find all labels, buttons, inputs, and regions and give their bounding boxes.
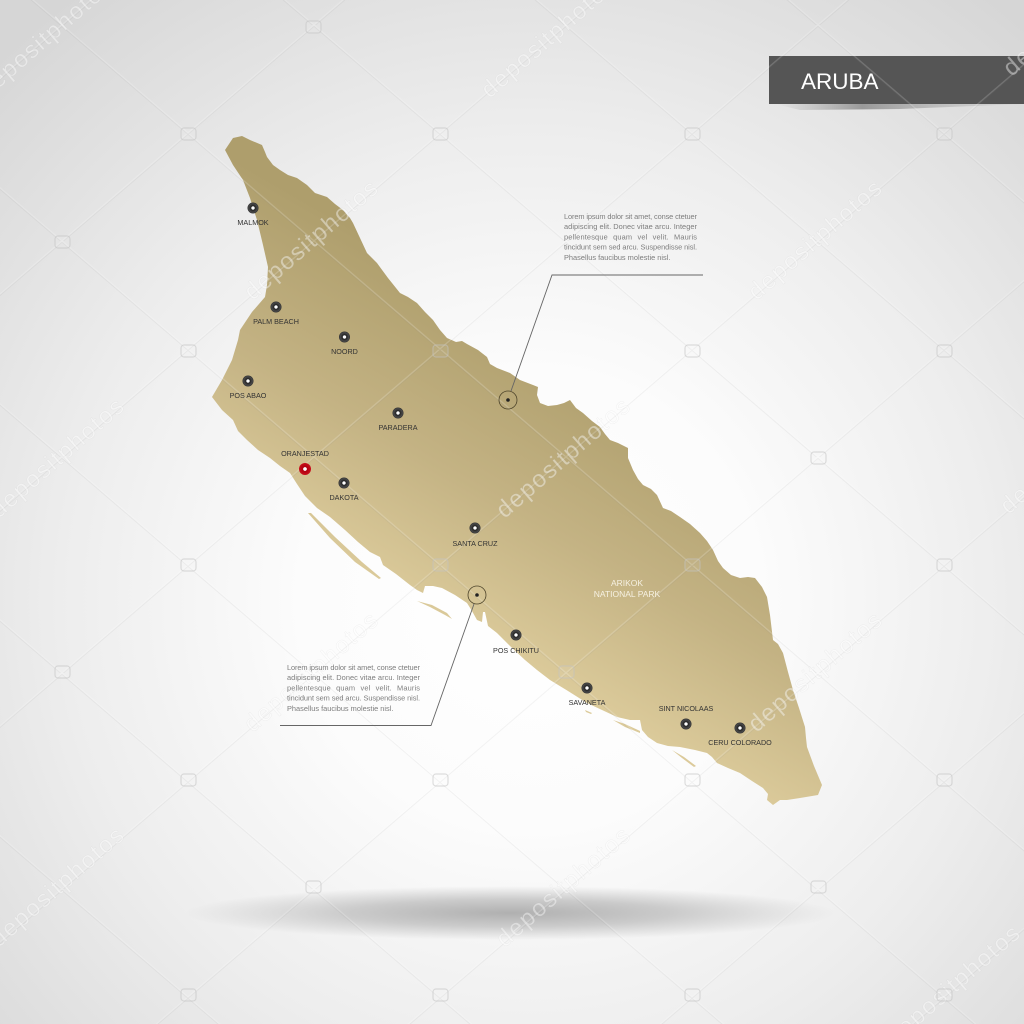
city labels: NOORD [331,347,358,356]
city labels: SINT NICOLAAS [659,704,713,713]
callout: lower: tincidunt sem sed arcu. Suspendisse nisl. [287,694,420,703]
callout: upper: pellentesque quam vel velit. Mauris [564,232,697,241]
title banner shadow [775,104,1024,110]
watermark text: depositphotos [239,607,383,738]
watermark text: depositphotos [743,607,887,738]
callout: upper: adipiscing elit. Donec vitae arcu. Integer [564,222,698,231]
watermark text: depositphotos [239,175,383,306]
callout: lower: Phasellus faucibus molestie nisl. [287,704,393,713]
islet: small reef [585,710,592,714]
city labels: POS CHIKITU [493,646,539,655]
islet: Sint Nicolaas reef [672,750,696,767]
city labels: PARADERA [378,423,418,432]
callout: upper: Lorem ipsum dolor sit amet, conse ctetuer [564,212,698,221]
watermark text: depositphotos [491,822,635,953]
ground shadow [185,886,835,940]
title banner: ARUBA [801,69,879,94]
callout: lower: pellentesque quam vel velit. Mauris [287,683,420,692]
city labels: PALM BEACH [253,317,299,326]
title banner [769,56,1024,104]
city labels: POS ABAO [230,391,267,400]
callout: upper: tincidunt sem sed arcu. Suspendisse nisl. [564,243,697,252]
park label: NATIONAL PARK [594,589,661,599]
watermark text: depositphotos [491,393,635,524]
capital pin: Oranjestad [299,463,311,475]
city labels: DAKOTA [329,493,359,502]
city labels: SANTA CRUZ [452,539,498,548]
city pins [242,202,746,734]
map of Aruba [212,136,822,805]
islet: Oranjestad reef [308,513,381,579]
watermark text: depositphotos [743,175,887,306]
city labels: ORANJESTAD [281,449,329,458]
park label: ARIKOK [611,578,643,588]
city labels [230,218,772,747]
city labels: MALMOK [237,218,269,227]
city labels: CERU COLORADO [708,738,772,747]
park label [594,578,661,599]
callout: lower: Lorem ipsum dolor sit amet, conse ctetuer [287,663,421,672]
callout: upper: Phasellus faucibus molestie nisl. [564,253,670,262]
callout: upper [499,212,703,409]
islet: Santa Cruz reef [417,601,452,619]
callout: lower: adipiscing elit. Donec vitae arcu. Integer [287,673,421,682]
islet: Savaneta reef [613,720,640,733]
city labels: SAVANETA [569,698,606,707]
callout: lower [280,586,486,726]
